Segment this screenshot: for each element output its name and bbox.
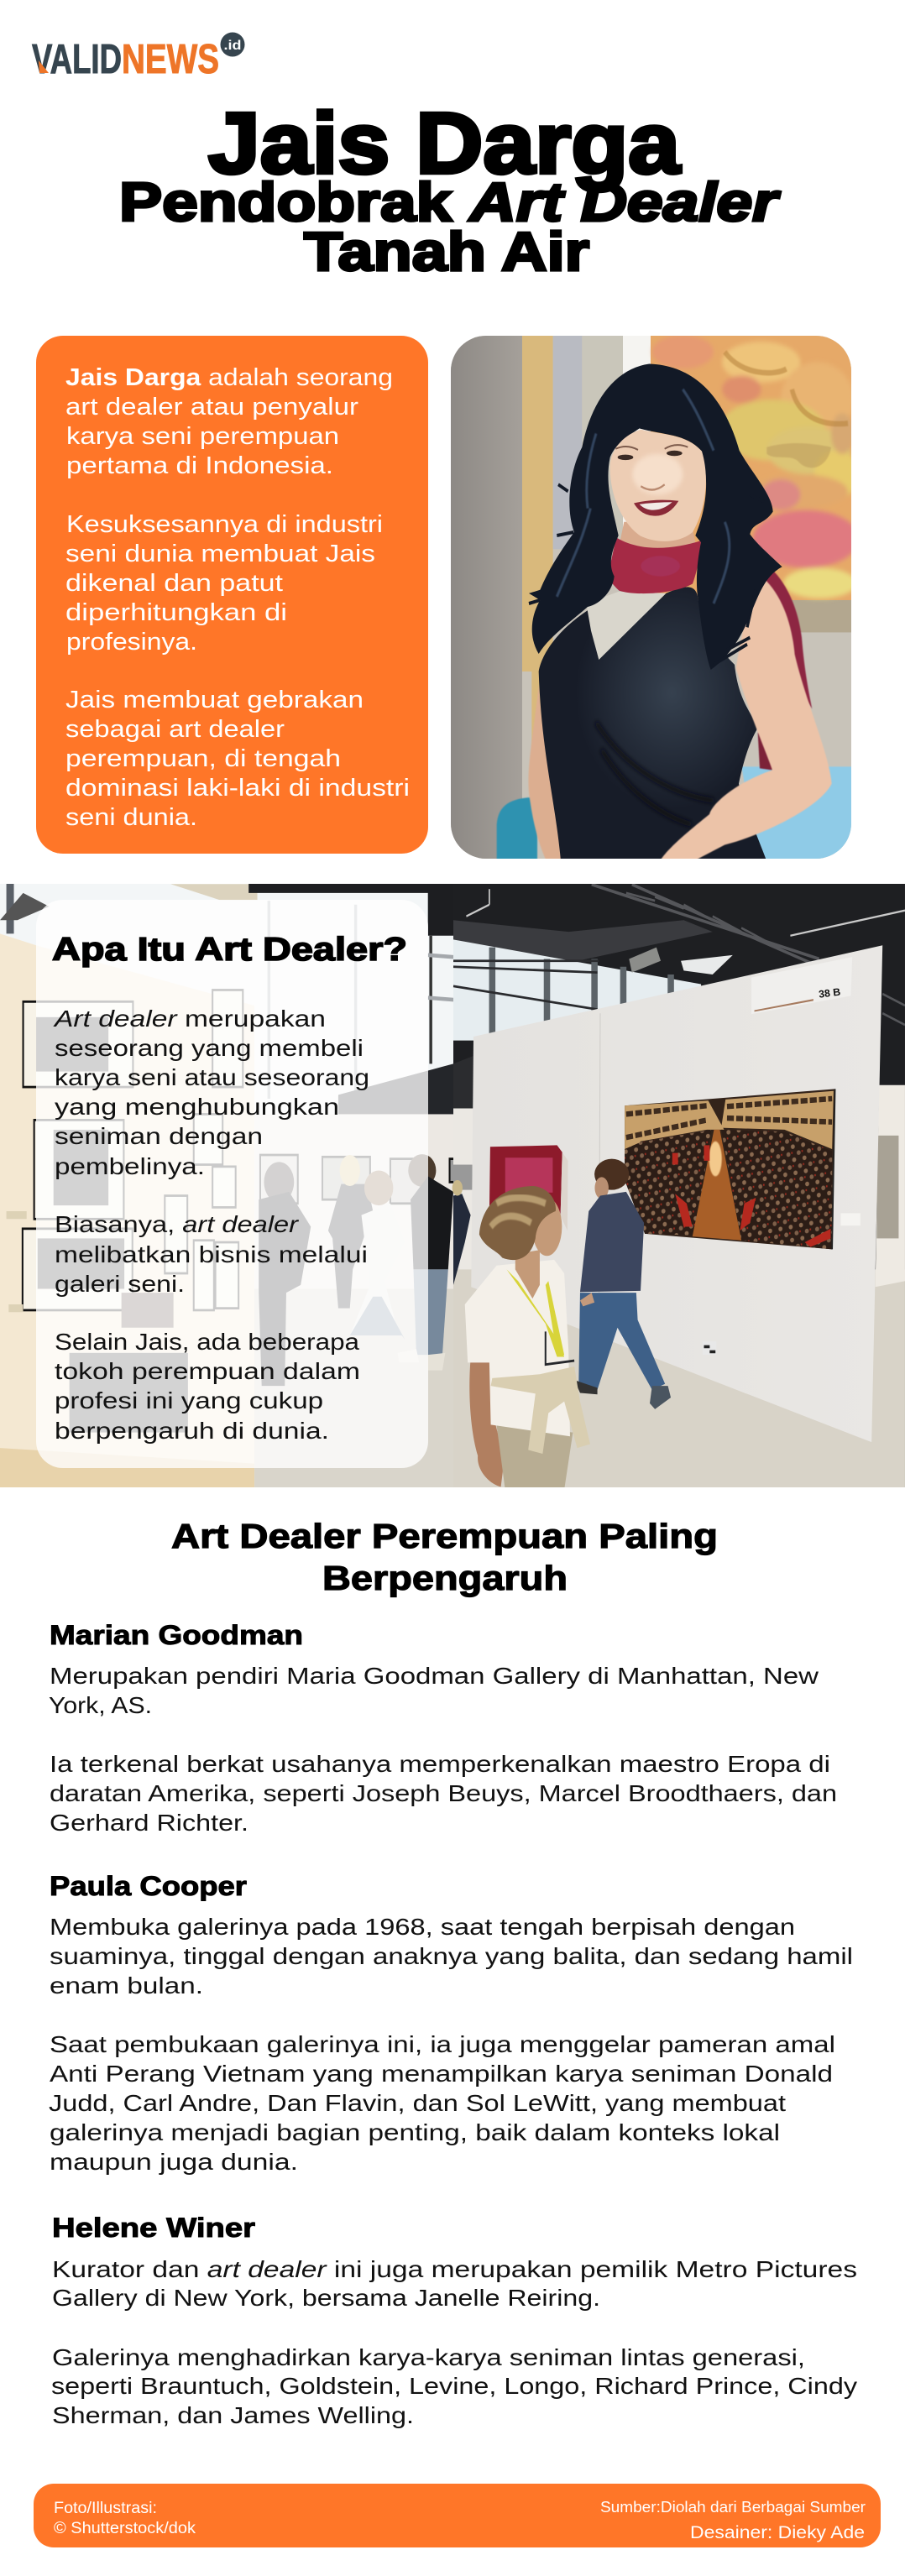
face [610, 430, 706, 541]
description [49, 1663, 837, 1836]
intro text: art dealer atau penyalur [65, 394, 359, 421]
panel body text [53, 1006, 369, 1444]
red scarf [609, 537, 701, 593]
dress [539, 587, 768, 865]
title: Jais Darga [208, 95, 681, 191]
background visitor [453, 1194, 471, 1285]
panel body text: galeri seni. [55, 1271, 185, 1297]
description: Sherman, dan James Welling. [52, 2402, 414, 2428]
description [49, 1914, 853, 2175]
logo badge .id: .id [223, 39, 242, 53]
photo: portrait of Jais Darga [445, 332, 859, 865]
red box artwork [489, 1145, 568, 1231]
description: York, AS. [49, 1692, 152, 1718]
photo right side: exhibition wall [452, 881, 905, 1490]
intro text: profesinya. [66, 629, 197, 656]
description: galerinya menjadi bagian penting, baik dalam konteks lokal [50, 2119, 780, 2145]
description: Kurator dan art dealer ini juga merupakan pemilik Metro Pictures [52, 2256, 857, 2282]
panel: orange intro [36, 336, 428, 854]
section heading: Berpengaruh [322, 1559, 568, 1597]
maroon scarf behind shoulder [756, 559, 812, 770]
footer credit: source and designer [600, 2499, 866, 2542]
intro text: Kesuksesannya di industri [66, 511, 383, 538]
description: Ia terkenal berkat usahanya memperkenalkan maestro Eropa di [50, 1751, 830, 1777]
intro text: sebagai art dealer [65, 716, 285, 743]
intro text: Jais membuat gebrakan [65, 687, 364, 713]
panel body text: Art dealer merupakan [53, 1006, 326, 1032]
logo badge .id [220, 32, 245, 57]
intro text: perempuan, di tengah [65, 745, 341, 772]
panel body text: profesi ini yang cukup [55, 1387, 323, 1413]
description: Saat pembukaan galerinya ini, ia juga menggelar pameran amal [50, 2031, 835, 2057]
large theatre audience artwork [625, 1089, 835, 1249]
description: suaminya, tinggal dengan anaknya yang balita, dan sedang hamil [50, 1943, 853, 1969]
panel body text: Biasanya, art dealer [55, 1211, 300, 1237]
hair [529, 363, 782, 670]
white inner drape [586, 592, 666, 660]
footer credit: source and designer: Sumber:Diolah dari Berbagai Sumber [600, 2499, 866, 2516]
description: maupun juga dunia. [50, 2149, 298, 2175]
intro text: dikenal dan patut [65, 570, 283, 597]
intro text: karya seni perempuan [66, 423, 339, 450]
logo wordmark [32, 37, 219, 82]
photo: gallery exhibition [0, 881, 905, 1490]
footer bar [34, 2484, 881, 2547]
profile: Paula Cooper [49, 1871, 853, 2175]
panel body text: seseorang yang membeli [55, 1035, 364, 1061]
cushions [497, 766, 859, 865]
man walking [574, 1159, 671, 1409]
visitors behind panel [259, 1154, 453, 1386]
booth sign 38 B: 38 B [818, 986, 841, 1001]
intro text: dominasi laki-laki di industri [65, 775, 410, 802]
profile: Marian Goodman [49, 1620, 837, 1836]
intro text: Jais Darga adalah seorang [65, 364, 393, 391]
intro text [65, 364, 410, 831]
description: seperti Brauntuch, Goldstein, Levine, Longo, Richard Prince, Cindy [51, 2373, 857, 2399]
left arm [528, 688, 561, 859]
title: Pendobrak Art Dealer [119, 171, 781, 233]
section heading [171, 1517, 718, 1597]
panel body text: karya seni atau seseorang [55, 1064, 369, 1090]
description: Membuka galerinya pada 1968, saat tengah berpisah dengan [50, 1914, 795, 1940]
panel body text: pembelinya. [55, 1153, 205, 1179]
ceiling truss [466, 885, 905, 1025]
abstract painting behind her [652, 335, 859, 598]
description: Judd, Carl Andre, Dan Flavin, dan Sol LeWitt, yang membuat [49, 2090, 786, 2116]
logo wordmark: VALID [32, 37, 122, 82]
title [119, 95, 781, 282]
panel body text: Selain Jais, ada beberapa [55, 1329, 359, 1355]
description [51, 2256, 857, 2428]
logo: Validnews.id [32, 32, 245, 82]
name: Paula Cooper [50, 1871, 247, 1901]
panel body text: yang menghubungkan [55, 1094, 339, 1120]
profile: Helene Winer [51, 2213, 857, 2428]
description: Galerinya menghadirkan karya-karya seniman lintas generasi, [52, 2344, 805, 2370]
intro text: seni dunia membuat Jais [65, 541, 375, 567]
description: Merupakan pendiri Maria Goodman Gallery di Manhattan, New [50, 1663, 819, 1689]
panel body text: seniman dengan [55, 1123, 263, 1149]
section heading: Art Dealer Perempuan Paling [171, 1517, 718, 1555]
neck [619, 522, 697, 549]
name: Marian Goodman [50, 1620, 303, 1650]
intro text: pertama di Indonesia. [66, 452, 333, 479]
panel body text: berpengaruh di dunia. [55, 1418, 329, 1444]
description: daratan Amerika, seperti Joseph Beuys, Marcel Broodthaers, dan [50, 1780, 837, 1806]
photo left side: gallery booth [0, 881, 461, 1490]
title: Tanah Air [304, 221, 589, 282]
footer credit: photo: © Shutterstock/dok [54, 2520, 196, 2537]
panel heading: Apa Itu Art Dealer? [52, 932, 407, 968]
portrait background [445, 332, 859, 865]
panel body text: tokoh perempuan dalam [55, 1358, 360, 1384]
description: Anti Perang Vietnam yang menampilkan karya seniman Donald [50, 2061, 833, 2087]
main white wall [471, 945, 882, 1442]
description: enam bulan. [50, 1972, 203, 1999]
intro text: seni dunia. [65, 804, 197, 831]
dress folds [596, 723, 714, 824]
panel: Apa Itu Art Dealer [36, 900, 428, 1468]
intro text: diperhitungkan di [65, 599, 287, 626]
woman in white shirt [465, 1186, 590, 1490]
logo wordmark: NEWS [122, 37, 219, 82]
footer credit: photo: Foto/Illustrasi: [54, 2500, 157, 2517]
right arm and shoulder [657, 575, 832, 865]
panel body text: melibatkan bisnis melalui [55, 1241, 368, 1267]
name: Helene Winer [52, 2213, 255, 2243]
description: Gerhard Richter. [50, 1810, 248, 1836]
footer credit: photo [54, 2500, 196, 2537]
footer credit: source and designer: Desainer: Dieky Ade [690, 2523, 865, 2542]
description: Gallery di New York, bersama Janelle Reiring. [52, 2285, 600, 2311]
booth sign 38 B [751, 957, 852, 1014]
